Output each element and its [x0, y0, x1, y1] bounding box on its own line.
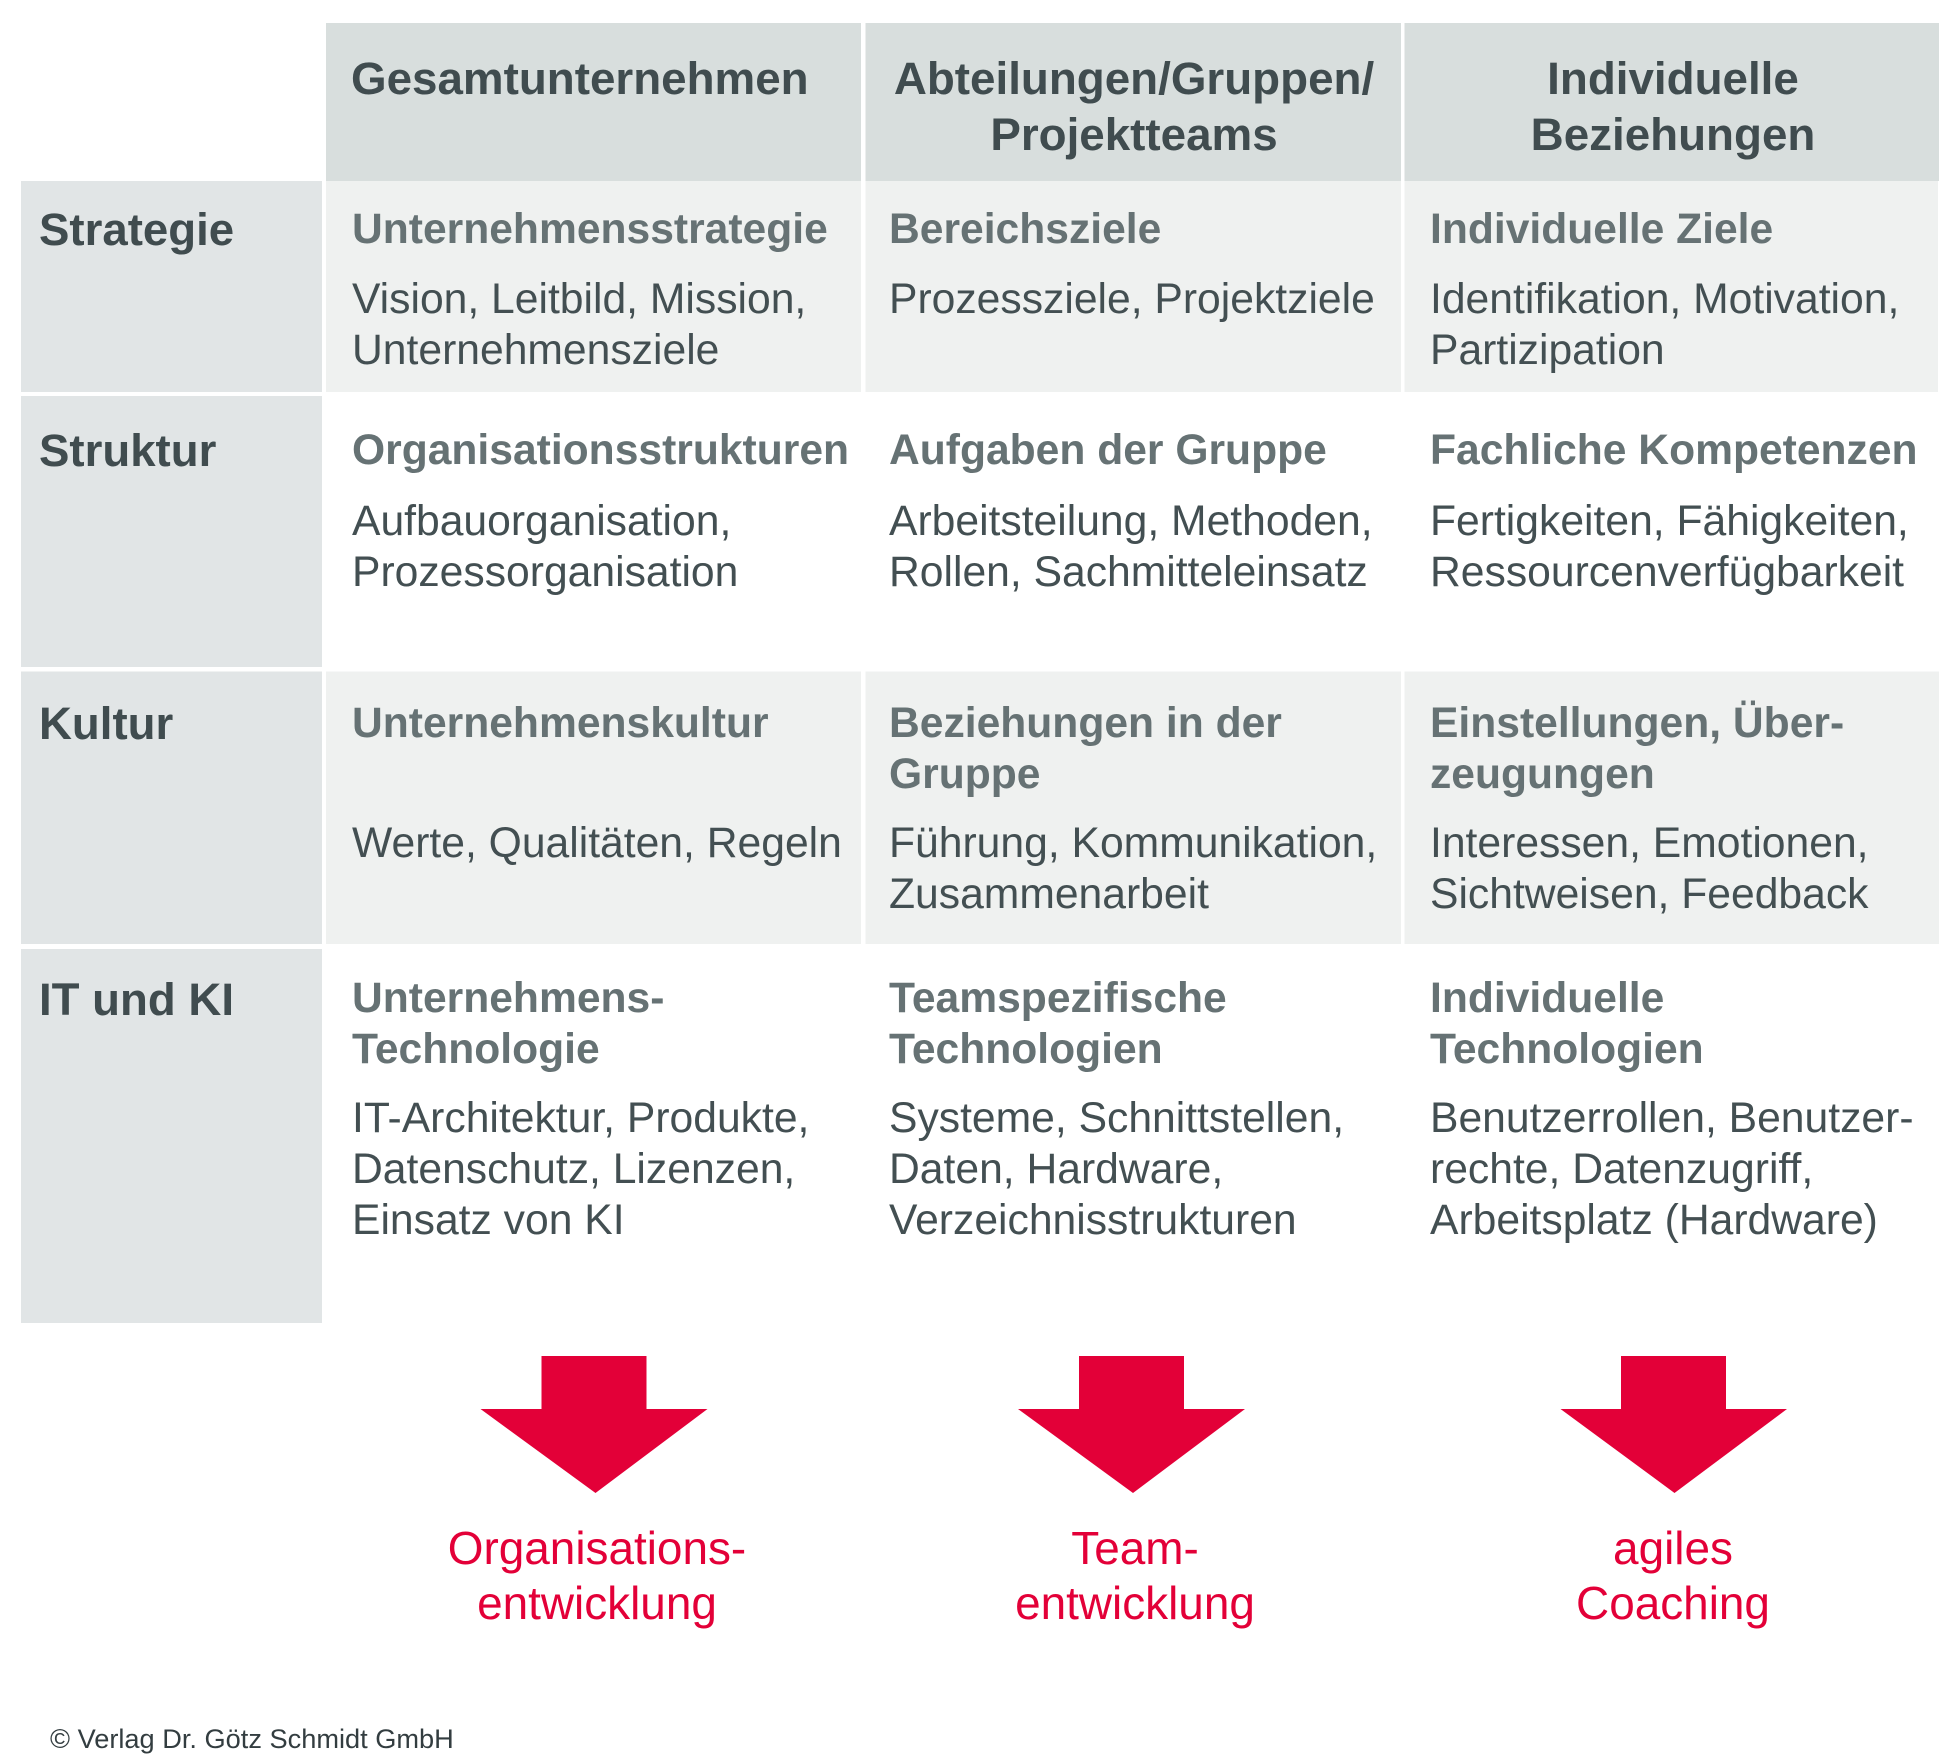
label: Organisationsentwicklung: entwicklung [477, 1577, 717, 1629]
label: agiles Coaching [1576, 1522, 1770, 1629]
cell: Einstellungen, Überzeugungen: Interessen, Emotionen, [1430, 819, 1869, 867]
copyright: © Verlag Dr. Götz Schmidt GmbH [50, 1723, 454, 1754]
header cell: Gesamtunternehmen [326, 23, 861, 181]
cell: Unternehmensstrategie: Vision, Leitbild, Mission, [352, 275, 806, 323]
cell: Individuelle Technologien: Arbeitsplatz (Hardware) [1430, 1196, 1878, 1244]
cell: Aufgaben der Gruppe: Aufgaben der Gruppe [889, 426, 1327, 474]
cell: Individuelle Technologien: Individuelle [1430, 974, 1664, 1022]
cell: Individuelle Ziele: Individuelle Ziele [1430, 205, 1773, 253]
cell: Individuelle Ziele: Partizipation [1430, 326, 1665, 374]
cell: Aufgaben der Gruppe [889, 426, 1373, 596]
header cell: Abteilungen/Gruppen/Projektteams [866, 23, 1401, 181]
cell: Individuelle Technologien: Technologien [1430, 1025, 1704, 1073]
row header: Struktur [21, 396, 322, 667]
cell: Einstellungen, Überzeugungen: Einstellungen, Über- [1430, 699, 1844, 747]
cell: Aufgaben der Gruppe: Rollen, Sachmitteleinsatz [889, 548, 1368, 596]
cell: Teamspezifische Technologien: Systeme, Schnittstellen, [889, 1094, 1344, 1142]
arrow: Organisationsentwicklung [480, 1356, 708, 1493]
cell: Unternehmenskultur [326, 672, 861, 944]
header cell: Abteilungen/Gruppen/Projektteams: Projektteams [990, 109, 1278, 160]
cell: Unternehmenskultur: Unternehmenskultur [352, 699, 769, 747]
cell: Beziehungen in der Gruppe: Zusammenarbeit [889, 870, 1209, 918]
cell: Bereichsziele: Bereichsziele [889, 205, 1161, 253]
cell: Organisationsstrukturen: Aufbauorganisation, [352, 497, 731, 545]
cell: Organisationsstrukturen: Organisationsstrukturen [352, 426, 849, 474]
header cell: Individuelle Beziehungen: Beziehungen [1531, 109, 1815, 160]
cell: Teamspezifische Technologien [889, 974, 1344, 1244]
cell: Unternehmens-Technologie: Unternehmens- [352, 974, 664, 1022]
cell: Unternehmens-Technologie: Datenschutz, Lizenzen, [352, 1145, 795, 1193]
cell: Unternehmensstrategie [326, 181, 861, 392]
cell: Beziehungen in der Gruppe [866, 672, 1401, 944]
cell: Individuelle Ziele: Identifikation, Motivation, [1430, 275, 1899, 323]
label: agiles Coaching: Coaching [1576, 1577, 1770, 1629]
cell: Teamspezifische Technologien: Verzeichnisstrukturen [889, 1196, 1297, 1244]
cell: Einstellungen, Überzeugungen [1404, 672, 1939, 944]
cell: Teamspezifische Technologien: Technologien [889, 1025, 1163, 1073]
row header: Strategie [21, 181, 322, 392]
cell: Individuelle Technologien: rechte, Datenzugriff, [1430, 1145, 1813, 1193]
cell: Unternehmensstrategie: Unternehmensziele [352, 326, 719, 374]
cell: Unternehmensstrategie: Unternehmensstrategie [352, 205, 828, 253]
cell: Bereichsziele: Prozessziele, Projektziele [889, 275, 1375, 323]
label: Teamentwicklung: Team- [1071, 1522, 1199, 1574]
cell: Fachliche Kompetenzen [1430, 426, 1918, 596]
cell: Einstellungen, Überzeugungen: zeugungen [1430, 750, 1655, 798]
row header: Kultur: Kultur [39, 698, 173, 749]
label: Organisationsentwicklung [448, 1522, 746, 1629]
row header: Struktur: Struktur [39, 425, 217, 476]
arrow: Teamentwicklung [1018, 1356, 1245, 1493]
label: Teamentwicklung [1015, 1522, 1255, 1629]
label: Organisationsentwicklung: Organisations- [448, 1522, 746, 1574]
cell: Fachliche Kompetenzen: Fachliche Kompetenzen [1430, 426, 1918, 474]
cell: Unternehmens-Technologie [352, 974, 809, 1244]
header cell: Individuelle Beziehungen [1404, 23, 1939, 181]
row header: IT und KI: IT und KI [39, 974, 234, 1025]
cell: Unternehmens-Technologie: Einsatz von KI [352, 1196, 625, 1244]
header cell: Abteilungen/Gruppen/Projektteams: Abteilungen/Gruppen/ [894, 53, 1374, 104]
cell: Aufgaben der Gruppe: Arbeitsteilung, Methoden, [889, 497, 1373, 545]
cell: Unternehmens-Technologie: IT-Architektur, Produkte, [352, 1094, 809, 1142]
cell: Teamspezifische Technologien: Daten, Hardware, [889, 1145, 1223, 1193]
cell: Individuelle Technologien: Benutzerrollen, Benutzer- [1430, 1094, 1914, 1142]
row header: IT und KI [21, 949, 322, 1323]
cell: Bereichsziele [866, 181, 1401, 392]
label: agiles Coaching: agiles [1613, 1522, 1733, 1574]
cell: Beziehungen in der Gruppe: Beziehungen in der [889, 699, 1282, 747]
cell: Individuelle Technologien [1430, 974, 1914, 1244]
header cell: Gesamtunternehmen: Gesamtunternehmen [351, 53, 809, 104]
label: Teamentwicklung: entwicklung [1015, 1577, 1255, 1629]
row header: Kultur [21, 672, 322, 944]
cell: Individuelle Ziele [1404, 181, 1938, 392]
cell: Beziehungen in der Gruppe: Gruppe [889, 750, 1040, 798]
row header: Strategie: Strategie [39, 204, 234, 255]
header cell: Individuelle Beziehungen: Individuelle [1547, 53, 1799, 104]
cell: Unternehmenskultur: Werte, Qualitäten, Regeln [352, 819, 842, 867]
cell: Fachliche Kompetenzen: Ressourcenverfügbarkeit [1430, 548, 1904, 596]
cell: Teamspezifische Technologien: Teamspezifische [889, 974, 1227, 1022]
cell: Organisationsstrukturen [352, 426, 849, 596]
cell: Organisationsstrukturen: Prozessorganisation [352, 548, 738, 596]
cell: Unternehmens-Technologie: Technologie [352, 1025, 600, 1073]
cell: Fachliche Kompetenzen: Fertigkeiten, Fähigkeiten, [1430, 497, 1909, 545]
cell: Einstellungen, Überzeugungen: Sichtweisen, Feedback [1430, 870, 1869, 918]
arrow: agiles Coaching [1560, 1356, 1787, 1493]
cell: Beziehungen in der Gruppe: Führung, Kommunikation, [889, 819, 1377, 867]
